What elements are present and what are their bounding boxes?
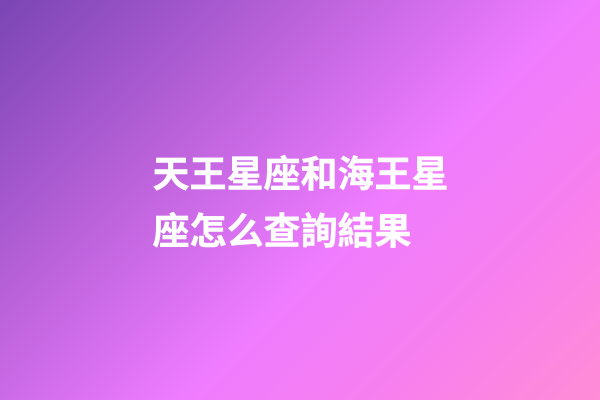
title bbox=[152, 154, 448, 252]
title: 座怎么查詢結果 bbox=[152, 211, 412, 252]
title: 天王星座和海王星 bbox=[152, 154, 448, 195]
